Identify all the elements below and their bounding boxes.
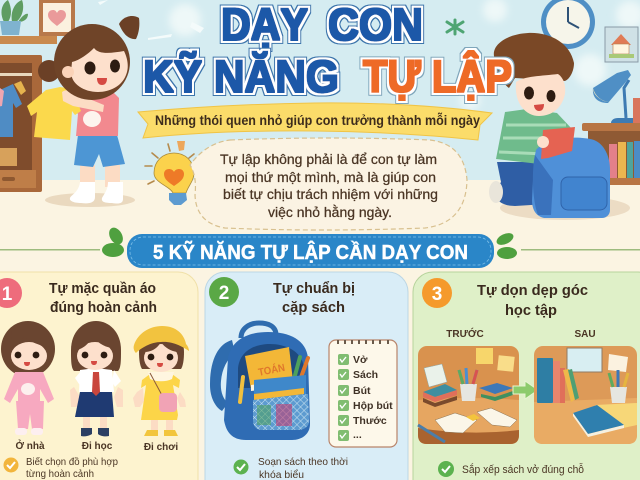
outfit labels: Đi học	[82, 441, 113, 452]
desk top	[582, 123, 640, 131]
handle	[241, 323, 276, 338]
list items	[353, 354, 393, 441]
section heading	[0, 225, 640, 268]
line 1	[221, 0, 423, 50]
heading	[477, 282, 588, 319]
arm	[62, 90, 104, 112]
heading: học tập	[505, 302, 557, 319]
wardrobe	[0, 55, 42, 192]
eyes	[524, 86, 556, 102]
books	[609, 141, 640, 178]
green shirt	[496, 109, 572, 165]
shirt stripes	[499, 125, 566, 154]
intro text: việc nhỏ hằng ngày.	[268, 205, 392, 220]
opening	[238, 344, 304, 388]
heading	[273, 280, 355, 316]
legs and socks	[70, 165, 123, 204]
heart	[164, 169, 184, 186]
after label: SAU	[574, 329, 596, 340]
book TOÁN: TOÁN	[257, 361, 286, 379]
panel 2: school bag	[205, 272, 408, 480]
mouth	[534, 104, 544, 111]
house picture	[605, 27, 638, 62]
after scene: tidy desk	[534, 346, 637, 444]
check marks	[340, 357, 346, 438]
base	[169, 193, 187, 205]
shelf board	[0, 36, 57, 44]
soft clouds on wall	[169, 0, 640, 110]
girl holding yellow shirt	[27, 16, 139, 207]
mesh pocket	[253, 394, 309, 430]
check boxes	[338, 354, 349, 441]
line 1: CON	[328, 0, 423, 50]
intro text	[220, 152, 438, 220]
front pocket	[254, 375, 306, 403]
badge 3: 3	[432, 284, 442, 305]
card	[413, 272, 640, 480]
outfit labels: Đi chơi	[144, 442, 178, 453]
desk lamp	[593, 70, 633, 123]
girl with hat and bag	[133, 326, 189, 436]
heading: cặp sách	[282, 299, 345, 316]
badge 1: 1	[2, 284, 13, 305]
check text	[26, 456, 118, 480]
list items: Bút	[353, 385, 371, 397]
inner	[0, 63, 32, 170]
heading: đúng hoàn cảnh	[50, 299, 157, 316]
red book	[541, 127, 575, 159]
left rule	[0, 249, 100, 250]
ribbon subtitle	[138, 103, 492, 140]
heading: Tự chuẩn bị	[273, 280, 355, 297]
check text: từng hoàn cảnh	[26, 468, 94, 480]
wall background	[0, 0, 640, 182]
line 1: DẠY	[221, 0, 308, 50]
mouth	[97, 78, 107, 85]
dashed bubble	[190, 138, 467, 230]
face	[71, 48, 128, 92]
arrow	[513, 381, 538, 399]
storage box	[0, 148, 17, 166]
wall clock	[541, 0, 595, 49]
left leaves	[102, 225, 126, 257]
before scene: messy desk	[418, 346, 519, 444]
list items: ...	[353, 429, 362, 441]
lightbulb icon	[145, 141, 203, 205]
eyes	[84, 60, 120, 74]
card	[205, 272, 408, 480]
pink shirt	[70, 88, 119, 136]
yellow stripe	[254, 388, 304, 400]
girl in uniform	[70, 321, 123, 436]
decorative white leaves	[98, 0, 204, 40]
intro text: Tự lập không phải là để con tự làm	[220, 152, 437, 167]
badge 1	[0, 278, 22, 308]
floor background	[0, 180, 640, 480]
straps	[210, 340, 235, 411]
floor shadow	[45, 193, 135, 207]
outfit labels: Ở nhà	[15, 439, 45, 452]
list items: Thước	[353, 415, 387, 427]
blue pill	[127, 234, 494, 268]
heading: Tự mặc quần áo	[49, 280, 156, 297]
ponytail left	[38, 60, 60, 82]
ribbon shape	[138, 103, 492, 140]
subtitle text: Những thói quen nhỏ giúp con trưởng thành mỗi ngày	[155, 113, 480, 128]
outfit labels	[15, 439, 178, 453]
yellow shirt	[27, 87, 81, 140]
title: Dạy con kỹ năng tự lập	[143, 0, 512, 102]
shoe	[489, 181, 503, 203]
plant	[0, 0, 28, 35]
hanging clothes	[0, 81, 26, 137]
before label: TRƯỚC	[446, 327, 484, 340]
badge 3	[422, 278, 452, 308]
ponytail right	[119, 16, 139, 39]
check icon	[438, 461, 454, 477]
checklist notebook	[329, 340, 397, 447]
backpack pocket	[561, 177, 607, 210]
panel 1: dressing	[0, 272, 198, 480]
bulb	[154, 153, 194, 193]
pocket	[83, 111, 101, 127]
hand	[537, 136, 549, 148]
backpack main	[532, 138, 610, 218]
list items: Vở	[353, 354, 368, 366]
page	[329, 340, 397, 447]
pencils	[240, 357, 308, 402]
shorts	[74, 135, 125, 167]
desk body	[588, 131, 640, 185]
backpack shoulder	[533, 155, 553, 215]
face	[516, 74, 565, 116]
check text	[258, 456, 348, 480]
mesh content	[257, 404, 292, 426]
pill dashes	[130, 237, 491, 265]
shelf with plant and frame	[0, 0, 75, 44]
heading text: 5 KỸ NĂNG TỰ LẬP CẦN DẠY CON	[153, 240, 468, 264]
rays	[145, 144, 203, 184]
badge 2: 2	[219, 283, 229, 304]
ear	[62, 66, 74, 78]
check text: Biết chọn đồ phù hợp	[26, 456, 118, 468]
body	[224, 332, 310, 440]
boy packing backpack	[489, 33, 630, 220]
badge 2	[209, 277, 239, 307]
spark	[177, 141, 185, 151]
upright book	[633, 98, 640, 123]
floor shadow	[500, 196, 630, 220]
list items: Sách	[353, 369, 378, 381]
spiral	[338, 340, 388, 344]
rail	[0, 73, 32, 76]
line 2 orange: TỰ LẬP	[363, 51, 512, 102]
check icon	[4, 458, 18, 472]
heading: Tự dọn dẹp góc	[477, 282, 588, 299]
intro text: mọi thứ một mình, mà là giúp con	[225, 170, 436, 185]
heart frame	[39, 0, 75, 36]
desk shelf	[585, 178, 640, 185]
frame	[0, 55, 42, 192]
check text: Soạn sách theo thời	[258, 456, 348, 468]
backpack illustration	[210, 323, 310, 440]
girl in pyjamas	[1, 321, 55, 435]
line 2 blue: KỸ NĂNG	[143, 51, 339, 102]
pants	[495, 162, 547, 206]
right rule	[521, 249, 640, 250]
panel 3: tidying	[413, 272, 640, 480]
intro text: biết tự chịu trách nhiệm với những	[223, 187, 438, 202]
list items: Hộp bút	[353, 400, 393, 412]
hair	[494, 33, 574, 88]
hair	[54, 24, 130, 100]
right leaves	[495, 231, 517, 259]
intro callout	[190, 138, 467, 230]
card	[0, 272, 198, 480]
drawer	[0, 170, 36, 188]
green sparkle	[447, 20, 463, 34]
check icon	[234, 460, 248, 474]
heading	[49, 280, 157, 316]
desk with books	[582, 98, 640, 185]
check text: Sắp xếp sách vở đúng chỗ	[462, 463, 584, 476]
